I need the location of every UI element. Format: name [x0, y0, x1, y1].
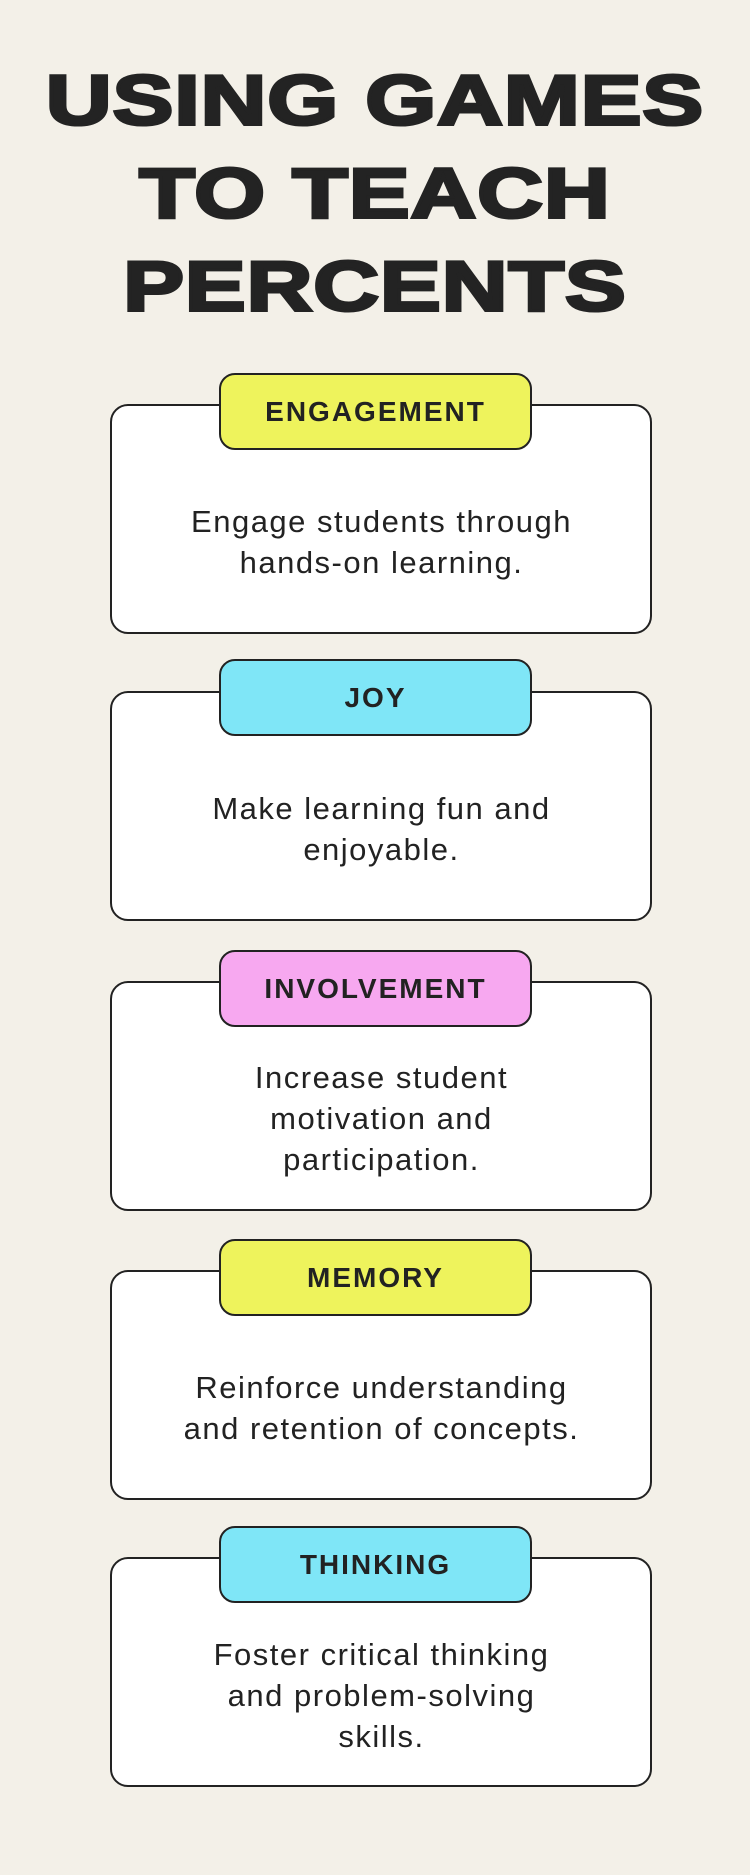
title: USING GAMES	[46, 61, 704, 140]
tag: joy: JOY	[344, 682, 407, 712]
panel: engagement	[110, 404, 652, 634]
text: thinking: and problem-solving	[228, 1678, 535, 1712]
text: engagement	[191, 504, 572, 580]
text: thinking: Foster critical thinking	[214, 1636, 549, 1672]
text: joy: enjoyable.	[303, 832, 460, 866]
tag: involvement: INVOLVEMENT	[264, 972, 487, 1004]
tag: thinking: THINKING	[300, 1548, 451, 1580]
tag: engagement: ENGAGEMENT	[265, 396, 486, 426]
title: TO TEACH	[139, 154, 611, 233]
text: engagement: Engage students through	[191, 504, 572, 539]
text: involvement: motivation and	[270, 1100, 493, 1136]
tag: involvement	[219, 950, 532, 1027]
text: involvement	[255, 1060, 508, 1176]
tag: memory: MEMORY	[307, 1262, 444, 1292]
text: involvement: Increase student	[255, 1060, 508, 1094]
text: engagement: hands-on learning.	[240, 545, 523, 580]
text: joy: Make learning fun and	[212, 790, 551, 826]
tag: thinking	[219, 1526, 532, 1603]
panel: thinking	[110, 1557, 652, 1787]
text: thinking	[214, 1636, 549, 1754]
title	[46, 61, 704, 326]
panel: memory	[110, 1270, 652, 1500]
text: involvement: participation.	[283, 1142, 480, 1176]
tag: joy	[219, 659, 532, 736]
tag: engagement	[219, 373, 532, 450]
panel: involvement	[110, 981, 652, 1211]
text: thinking: skills.	[338, 1718, 425, 1754]
text: memory: Reinforce understanding	[195, 1370, 568, 1405]
text: memory: and retention of concepts.	[184, 1411, 579, 1446]
panel: joy	[110, 691, 652, 921]
tag: memory	[219, 1239, 532, 1316]
title: PERCENTS	[123, 247, 627, 326]
text: joy	[212, 790, 551, 866]
text: memory	[184, 1370, 579, 1446]
